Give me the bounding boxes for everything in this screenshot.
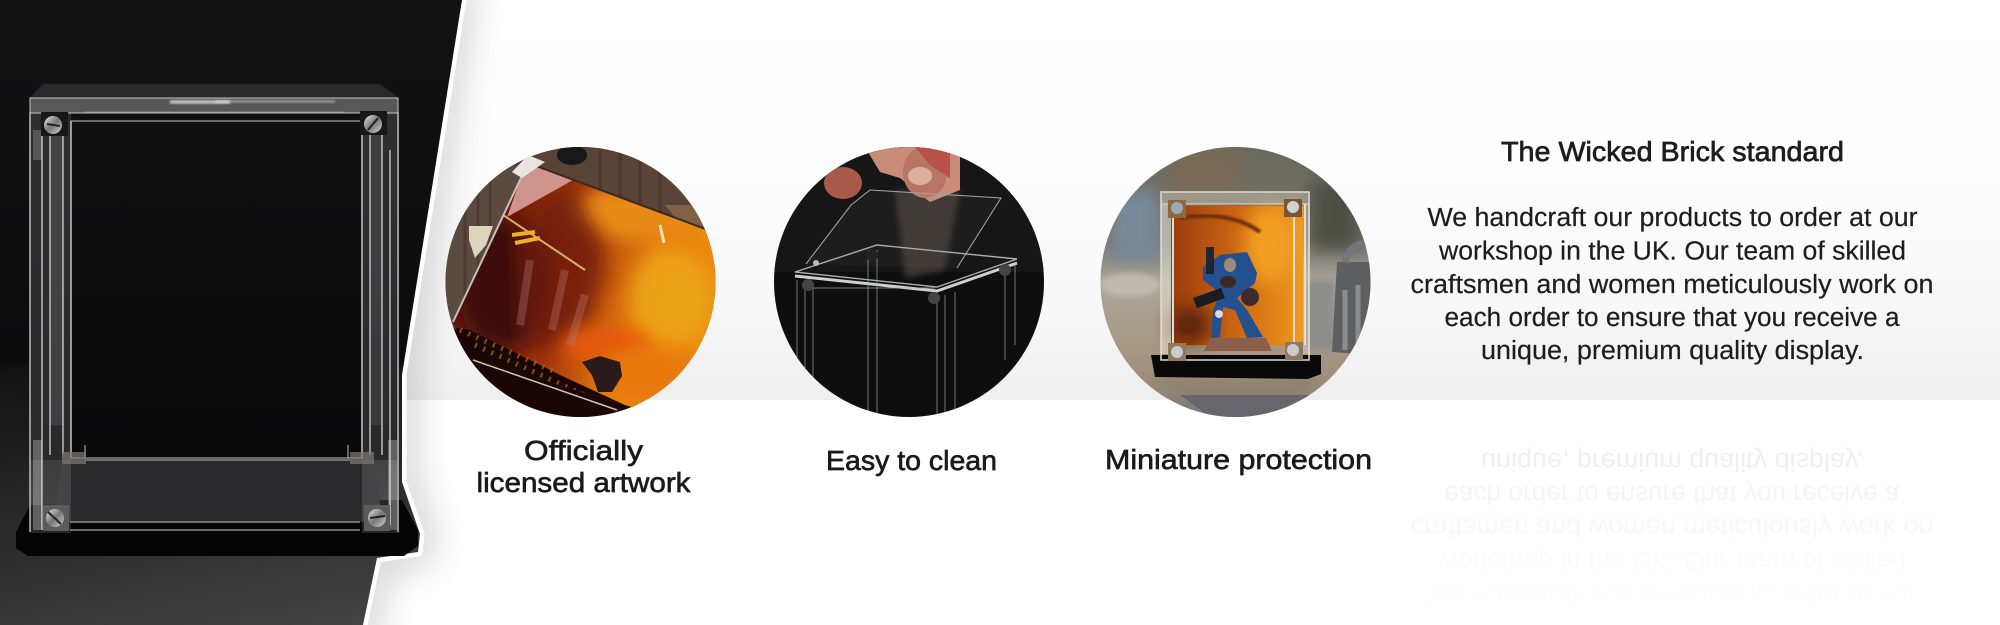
lid	[30, 84, 398, 113]
mirrored text reflection: unique, premium quality display.	[1481, 447, 1864, 475]
photo circle: miniature protection	[1100, 147, 1372, 417]
text block: workshop description: We handcraft our products to order at our	[1428, 204, 1918, 232]
black base plate	[16, 500, 418, 556]
screw: bottom right	[364, 505, 390, 531]
text block: workshop description: workshop in the UK. Our team of skilled	[1438, 238, 1906, 266]
open lid	[806, 190, 1001, 268]
label: officially licensed artwork: licensed artwork	[476, 467, 692, 498]
label: miniature protection: Miniature protection	[1105, 444, 1372, 475]
space marine miniature	[1195, 247, 1263, 338]
front bottom rail	[70, 522, 360, 530]
case screws	[802, 249, 1011, 304]
artwork panel	[453, 168, 716, 407]
dark lower frame of artwork panel	[454, 328, 638, 417]
display case artwork backing	[1171, 206, 1303, 345]
label: officially licensed artwork: Officially	[524, 435, 643, 466]
finger reflection	[895, 190, 960, 278]
case corner screws	[1168, 199, 1303, 361]
display case black base	[1151, 355, 1321, 379]
panel: dark product photo background with angled white edge	[0, 0, 462, 625]
text block: workshop description	[1410, 204, 1934, 365]
screw: bottom left	[43, 505, 69, 531]
text block: workshop description: unique, premium quality display.	[1481, 337, 1864, 365]
screw: top right	[360, 111, 387, 135]
mirrored text reflection: each order to ensure that you receive a	[1444, 480, 1900, 508]
mirrored text reflection: craftsmen and women meticulously work on	[1410, 513, 1934, 541]
blurred battlefield scenery	[1100, 150, 1372, 417]
case acrylic frame	[1161, 192, 1310, 360]
screw: top left	[41, 112, 68, 136]
mirrored text reflection: workshop in the UK. Our team of skilled	[1438, 546, 1906, 574]
wood background	[445, 145, 720, 322]
label: officially licensed artwork	[476, 435, 692, 498]
case interior backdrop	[30, 300, 398, 460]
photo circle: easy to clean	[774, 146, 1044, 420]
text block: workshop description: each order to ensure that you receive a	[1444, 304, 1900, 332]
label: easy to clean: Easy to clean	[826, 445, 997, 476]
heading: The Wicked Brick standard: The Wicked Brick standard	[1501, 136, 1844, 167]
acrylic back panel outline	[71, 121, 362, 458]
miniature base	[1204, 338, 1272, 351]
photo circle: officially licensed artwork	[446, 147, 716, 417]
artwork detail	[1170, 207, 1294, 343]
fingers	[824, 146, 960, 202]
left corner post	[30, 112, 71, 533]
text block: workshop description: craftsmen and women meticulously work on	[1410, 271, 1934, 299]
mirrored text reflection	[1410, 447, 1934, 608]
case frame	[795, 245, 1017, 420]
floor mat	[53, 460, 382, 522]
mirrored text reflection: We handcraft our products to order at our	[1428, 580, 1918, 608]
right corner post	[362, 112, 399, 533]
acrylic display case product photo	[16, 84, 418, 556]
panel edges	[537, 166, 705, 230]
